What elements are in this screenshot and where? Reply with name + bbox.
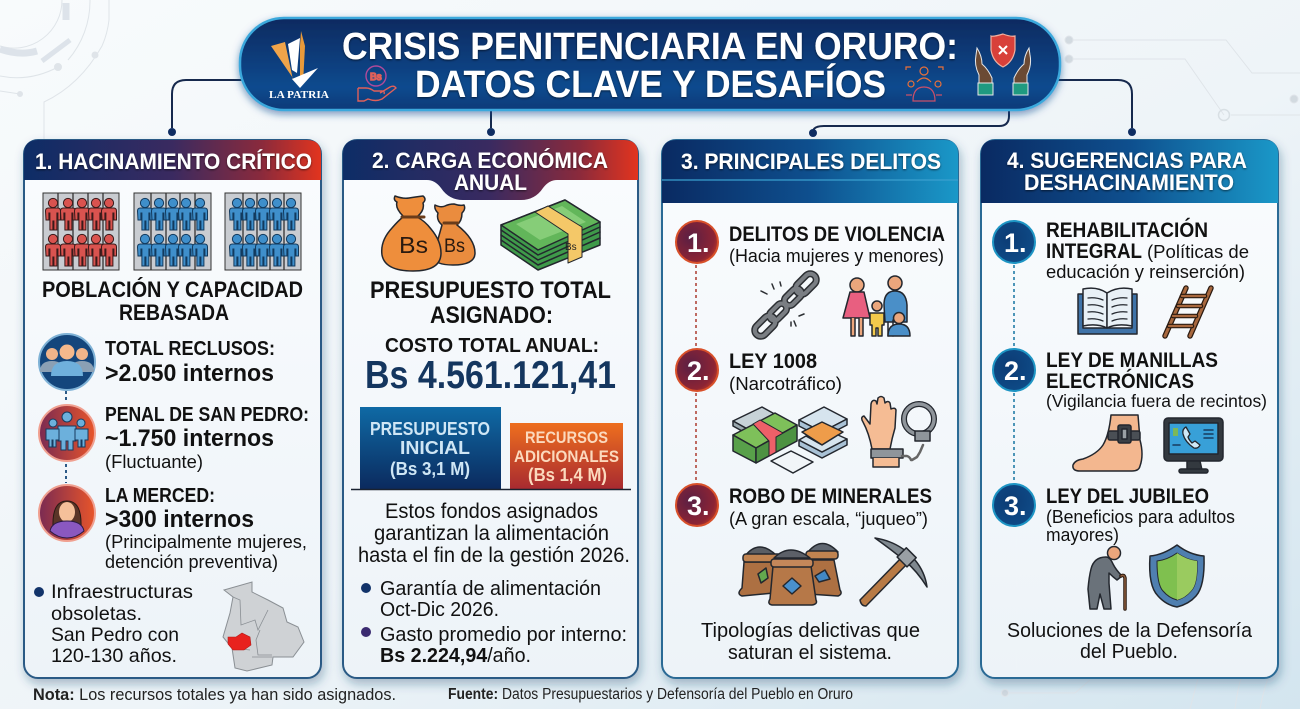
text: ley 1008 [729,350,842,394]
text: tipologías: saturan el sistema. [728,641,892,664]
text: delitos de violencia: DELITOS DE VIOLENCIA [729,223,945,246]
text: ley del jubileo [1046,485,1235,545]
panel 3: principales delitos [662,140,958,678]
bar: presupuesto inicial [360,407,501,489]
connector: left [168,80,245,136]
icon: money bags: Bs [399,232,428,258]
stat: total reclusos: TOTAL RECLUSOS: [105,338,275,360]
icon: mineral sacks [739,544,841,605]
panel 2 header [343,140,638,200]
icon: family [843,276,910,336]
bar: recursos adicionales: ADICIONALES [514,447,619,466]
text: tipologías [701,619,920,664]
panel 2 header: ANUAL [454,170,527,195]
connector: center [487,108,495,136]
text: ley del jubileo: (Beneficios para adultos [1046,506,1235,527]
text: robo de minerales: (A gran escala, “juqueo”) [729,508,928,529]
icon: book [1078,288,1137,334]
text: fondos [358,499,630,567]
stat: total reclusos [105,338,275,387]
icon: ankle monitor [1073,415,1142,471]
text: manillas electrónicas: ELECTRÓNICAS [1046,369,1194,393]
text: manillas electrónicas [1046,349,1267,411]
stat: La Merced: LA MERCED: [105,485,215,507]
icon: La Merced [39,485,95,541]
text: rehabilitación: REHABILITACIÓN [1046,218,1208,242]
text: robo de minerales: ROBO DE MINERALES [729,485,932,508]
icon: cell block blue 2 [225,193,301,270]
map: Bolivia with Oruro highlighted [223,582,304,671]
bar: presupuesto inicial: PRESUPUESTO [370,419,490,439]
stat: San Pedro: ~1.750 internos [105,425,274,452]
total figure: Bs 4.561.121,41 [365,354,616,397]
icon: San Pedro [39,405,95,461]
icon: drug packages [733,407,847,473]
panel 1 header [24,140,321,180]
stat: La Merced [105,485,307,572]
logo: La Patria: LA PATRIA [269,89,329,101]
panel 1: hacinamiento crítico [24,140,321,678]
badge 3: 3. [687,491,710,521]
icon: Bs hand: Bs [370,72,382,83]
text: tipologías: Tipologías delictivas que [701,619,920,642]
badge 3: 3. [1004,491,1027,521]
subheading: presupuesto total: COSTO TOTAL ANUAL: [385,335,599,357]
text: fondos: hasta el fin de la gestión 2026. [358,543,630,567]
icon: Bs hand [358,66,396,101]
icon: cash stack: Bs [565,242,577,253]
bullet: garantía [361,578,601,621]
text: fondos: Estos fondos asignados [385,499,598,523]
icon: cell block blue 1 [134,193,211,270]
badge 2 [676,349,718,391]
stat: La Merced: detención preventiva) [105,551,278,572]
bullet: gasto promedio: Gasto promedio por interno: [380,624,627,646]
text: soluciones: Soluciones de la Defensoría [1007,619,1253,642]
icon: meeting [906,67,943,101]
text: manillas electrónicas: (Vigilancia fuera de recintos) [1046,391,1267,411]
panel 2: carga económica anual [343,140,638,678]
icon: monitor [1164,418,1223,473]
panel 2 header: 2. CARGA ECONÓMICA [372,148,608,173]
panel 4 header [981,140,1278,203]
stat: San Pedro: (Fluctuante) [105,452,203,472]
bullet: infraestructuras [34,581,193,667]
icon: money bags: Bs [444,236,465,257]
bullet: infraestructuras: 120-130 años. [51,645,177,667]
icon: ladder [1165,288,1211,336]
bullet: garantía: Garantía de alimentación [380,578,601,600]
icon: pickaxe [860,538,927,606]
icon: broken chain [752,271,819,339]
icon: elderly person [1088,546,1125,609]
subheading: población: REBASADA [119,300,229,325]
text: rehabilitación: (Políticas de [1147,241,1249,262]
icon: money bags [382,196,475,271]
connector: right [1055,80,1136,136]
panel 1 header: 1. HACINAMIENTO CRÍTICO [35,149,312,174]
chart: budget bars [351,407,631,490]
subheading: presupuesto total [370,277,611,357]
title text [342,26,958,106]
icon: cash stack [501,200,600,270]
subheading: presupuesto total: PRESUPUESTO TOTAL [370,277,611,304]
icon: hands and shield [975,34,1031,95]
badge 2 [993,349,1035,391]
badge 2: 2. [687,356,710,386]
text: delitos de violencia [729,223,945,266]
text: ley del jubileo: LEY DEL JUBILEO [1046,485,1209,508]
badge 3 [676,484,718,526]
bullet: infraestructuras: Infraestructuras [51,581,193,603]
text: manillas electrónicas: LEY DE MANILLAS [1046,349,1218,372]
dashed connector [1013,265,1015,483]
badge 1 [993,221,1035,263]
icon: cell block red [43,193,119,270]
panel 3 header [662,140,958,203]
subheading: población [42,277,303,325]
logo: La Patria [269,31,329,101]
badge 2: 2. [1004,356,1027,386]
bullet: gasto promedio [361,624,627,667]
panel 4: sugerencias [981,140,1278,678]
dashed connector [695,265,697,483]
badge 1: 1. [1004,228,1027,258]
stat: San Pedro [105,404,309,472]
stat: La Merced: (Principalmente mujeres, [105,531,307,552]
panel 3 header: 3. PRINCIPALES DELITOS [681,149,941,174]
text: ley del jubileo: mayores) [1046,524,1119,545]
bullet: infraestructuras: obsoletas. [51,603,142,625]
stat: La Merced: >300 internos [105,506,254,533]
bar: recursos adicionales: (Bs 1,4 M) [528,465,607,485]
bullet: garantía: Oct-Dic 2026. [380,599,499,621]
dashed connector [65,391,67,483]
bar: recursos adicionales [510,423,623,489]
badge 3 [993,484,1035,526]
title text: CRISIS PENITENCIARIA EN ORURO: [342,26,958,68]
text: soluciones: del Pueblo. [1080,640,1178,663]
icon: hand with cuffs [862,396,934,467]
text: ley 1008: LEY 1008 [729,350,817,373]
title text: DATOS CLAVE Y DESAFÍOS [415,62,886,106]
stat: total reclusos: >2.050 internos [105,360,274,387]
footnote: fuente: Fuente: Datos Presupuestarios y Defensoría del Pueblo en Oruro [448,686,853,703]
text: delitos de violencia: (Hacia mujeres y menores) [729,245,944,266]
icon: shield [1150,545,1204,607]
connector: third [809,108,1009,137]
stat: San Pedro: PENAL DE SAN PEDRO: [105,404,309,426]
badge 1: 1. [687,228,710,258]
text: soluciones [1007,619,1253,663]
subheading: presupuesto total: ASIGNADO: [430,302,553,329]
panel 4 header: DESHACINAMIENTO [1024,170,1234,195]
text: robo de minerales [729,485,932,529]
bar: presupuesto inicial: INICIAL [400,438,470,458]
bar: recursos adicionales: RECURSOS [525,428,608,447]
badge 1 [676,221,718,263]
bar: presupuesto inicial: (Bs 3,1 M) [390,459,470,479]
text: fondos: garantizan la alimentación [374,521,609,545]
subheading: población: POBLACIÓN Y CAPACIDAD [42,277,303,302]
text: rehabilitación: educación y reinserción) [1046,261,1245,282]
footnote: nota: Nota: Los recursos totales ya han sido asignados. [33,685,396,704]
panel 4 header: 4. SUGERENCIAS PARA [1007,148,1247,173]
text: rehabilitación [1046,218,1249,282]
icon: total reclusos [39,334,95,390]
text: rehabilitación: INTEGRAL [1046,240,1142,263]
text: ley 1008: (Narcotráfico) [729,373,842,394]
bullet: gasto promedio: Bs 2.224,94/año. [380,645,531,667]
title banner [240,18,1060,110]
bullet: infraestructuras: San Pedro con [51,624,179,646]
